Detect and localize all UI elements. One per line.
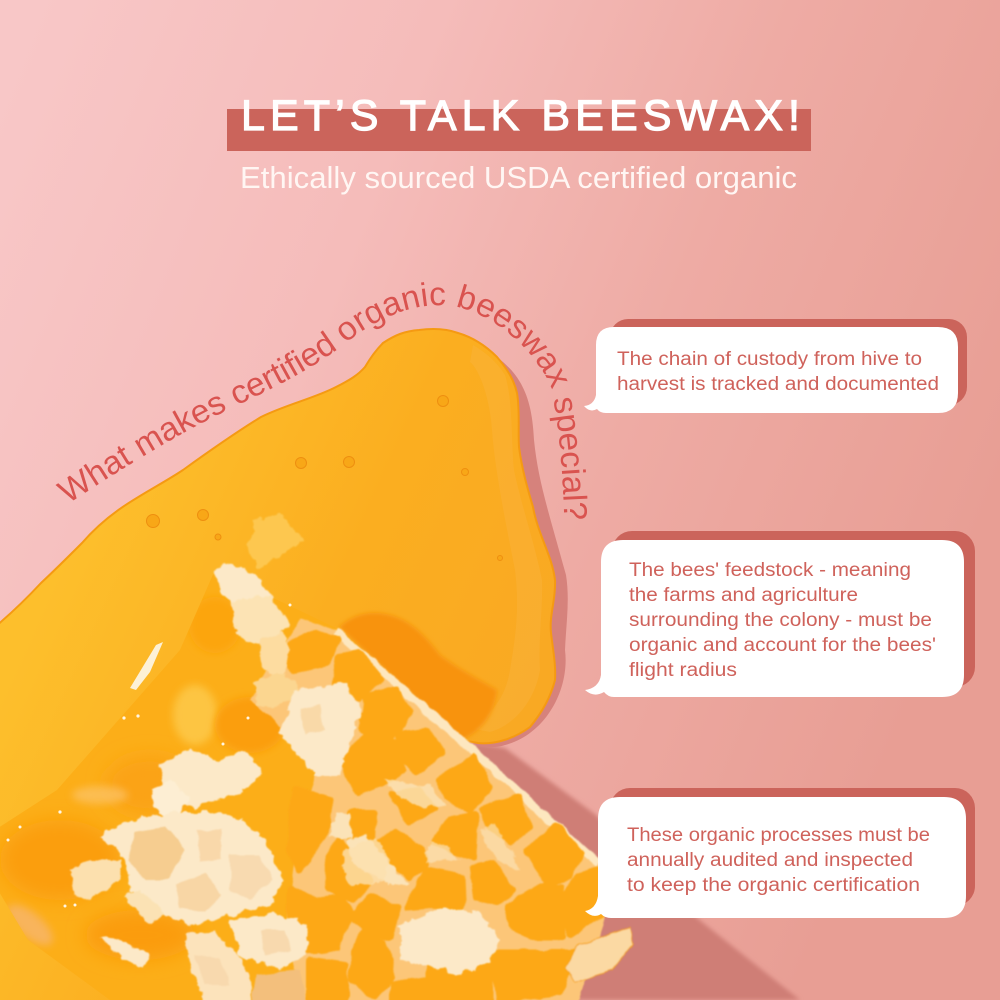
speech bubble 3	[585, 788, 975, 918]
white comb walls thickened	[330, 780, 520, 885]
illustration: honeycomb	[0, 515, 633, 1000]
loose flake	[565, 926, 633, 982]
title: LET’S TALK BEESWAX!	[241, 92, 800, 140]
speech bubble 2: organic and account for the bees'	[629, 635, 936, 656]
speech bubble 3: annually audited and inspected	[627, 850, 913, 871]
comb bright rim	[336, 632, 598, 864]
speech bubble 3: to keep the organic certification	[627, 875, 920, 896]
speech bubble 1	[584, 319, 967, 413]
wax streak	[130, 642, 163, 690]
hexagonal cells	[284, 633, 600, 1000]
flake inner shading	[128, 705, 325, 1000]
comb wall base	[250, 618, 604, 1000]
honey highlight band	[470, 345, 542, 732]
speech bubble 2: flight radius	[629, 660, 737, 681]
speech bubble 1: harvest is tracked and documented	[617, 374, 939, 395]
speech bubble 1: The chain of custody from hive to	[617, 349, 922, 370]
beeswax flakes	[70, 515, 500, 1000]
honey bubbles	[146, 396, 502, 560]
curved heading: What makes certified organic beeswax special?	[56, 282, 588, 519]
shadow: honeycomb cast shadow	[470, 742, 800, 1000]
title band	[227, 109, 811, 151]
speech bubble 2: The bees' feedstock - meaning	[629, 560, 911, 581]
speech bubble 2: surrounding the colony - must be	[629, 610, 932, 631]
wax specks	[6, 604, 292, 908]
honey shadow under comb	[339, 613, 497, 740]
illustration: honey puddle	[0, 329, 555, 1000]
speech bubble 2	[585, 531, 975, 697]
speech bubble 3: These organic processes must be	[627, 825, 930, 846]
speech bubble 2: the farms and agriculture	[629, 585, 858, 606]
translucent comb left area	[0, 574, 336, 1000]
shadow: honey puddle	[461, 357, 568, 747]
subtitle: Ethically sourced USDA certified organic	[240, 160, 797, 195]
